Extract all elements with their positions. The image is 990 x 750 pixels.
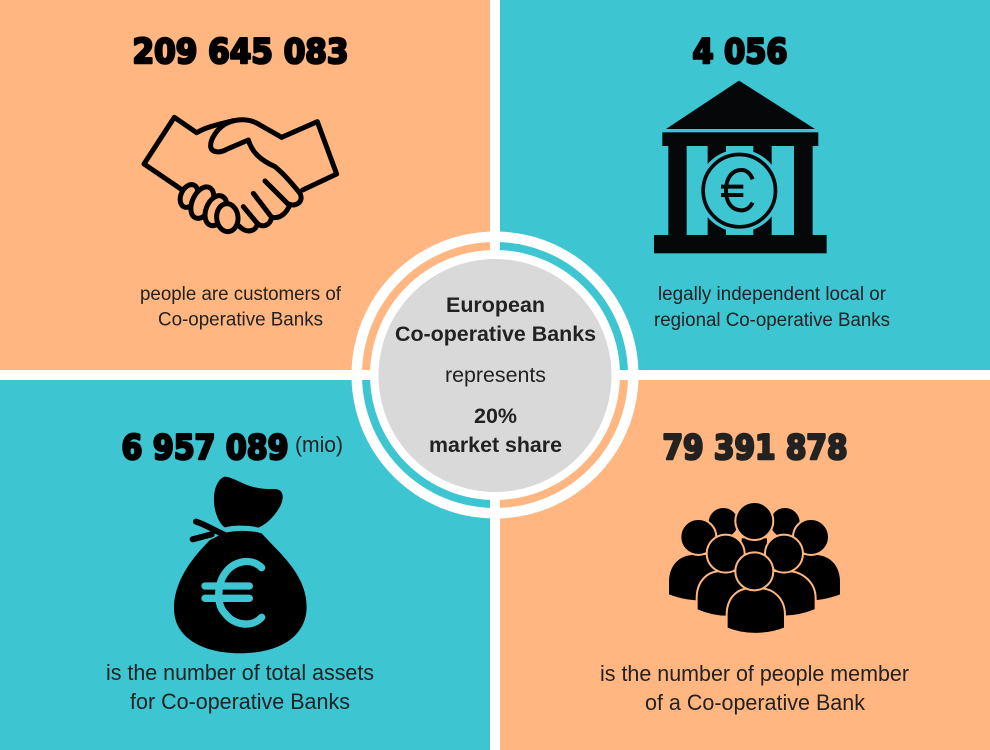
ring segment orange top left [366, 246, 495, 375]
icon: group of people [669, 502, 840, 634]
central text: market share [429, 433, 562, 457]
number: total assets: 6 957 089 [122, 428, 288, 468]
caption: members [600, 661, 909, 715]
central text: European [446, 293, 545, 317]
caption: local banks: regional Co-operative Banks [654, 310, 890, 331]
panel background orange [0, 0, 490, 370]
central badge [352, 232, 638, 518]
ring segment orange bottom right [495, 375, 624, 504]
panel: total assets [0, 380, 490, 750]
central text: Co-operative Banks [395, 322, 596, 346]
number: local banks: 4 056 [692, 32, 788, 72]
panel background orange [500, 380, 990, 750]
number: customers: 209 645 083 [132, 32, 348, 72]
caption: members: is the number of people member [600, 661, 909, 686]
caption: local banks: legally independent local or [658, 284, 887, 305]
panel background teal [0, 380, 490, 750]
icon: bank with euro [654, 81, 827, 253]
caption: customers: people are customers of [140, 284, 342, 305]
central text: represents [445, 363, 546, 387]
central text [395, 293, 596, 457]
caption: customers [140, 284, 342, 330]
caption: total assets [106, 660, 374, 714]
number: members: 79 391 878 [662, 428, 848, 468]
grey disc [378, 259, 612, 492]
ring segment teal bottom left [366, 375, 495, 504]
panel: local banks [500, 0, 990, 370]
icon: money bag with euro [174, 477, 307, 653]
icon: handshake [144, 117, 337, 233]
panel: customers [0, 0, 490, 370]
caption: members: of a Co-operative Bank [645, 690, 866, 715]
ring segment teal top right [495, 246, 624, 375]
caption: total assets: is the number of total assets [106, 660, 374, 685]
caption: total assets: for Co-operative Banks [130, 689, 350, 714]
caption: local banks [654, 284, 890, 331]
caption: customers: Co-operative Banks [158, 310, 323, 330]
white ring [352, 232, 638, 518]
central text: 20% [474, 404, 517, 428]
panel: members [500, 380, 990, 750]
unit: mio: (mio) [295, 432, 343, 457]
panel background teal [500, 0, 990, 370]
